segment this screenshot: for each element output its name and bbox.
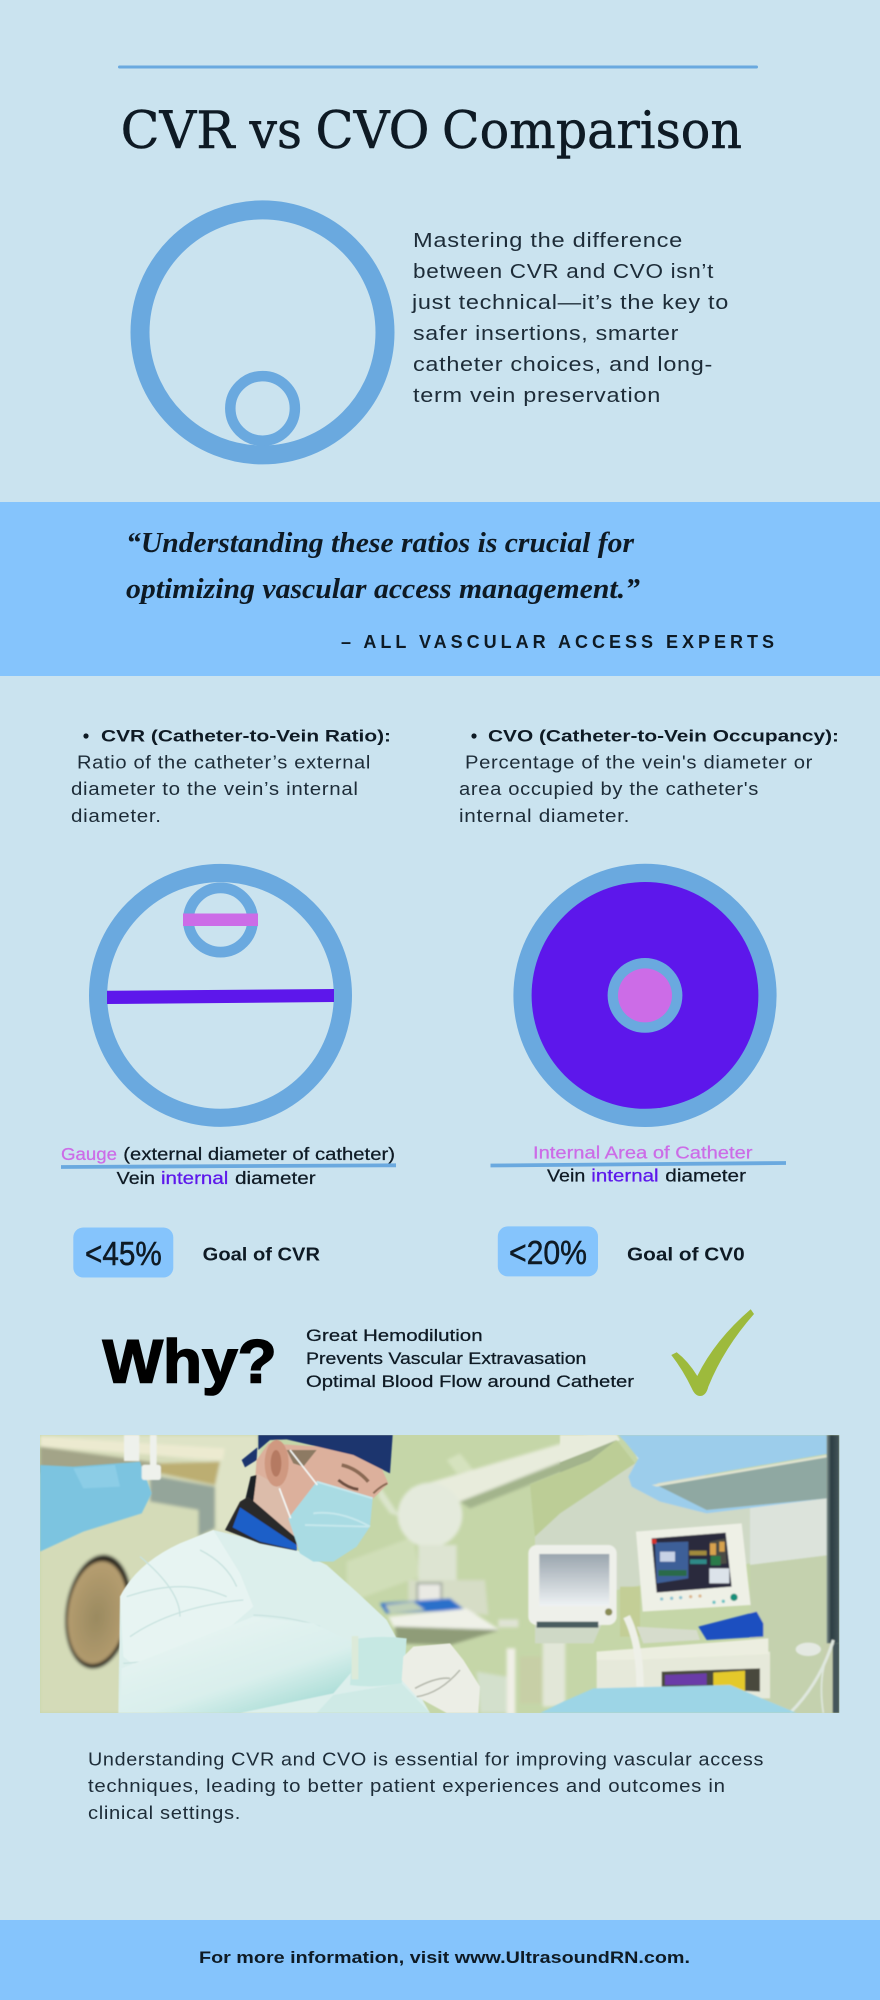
intro text: just technical—it’s the key to — [411, 292, 729, 314]
formula: CVO — [490, 1142, 786, 1186]
quote: “Understanding these ratios is crucial for — [126, 528, 635, 559]
formula: CVR: Gauge — [61, 1144, 117, 1164]
icon: catheter in vein — [140, 210, 385, 455]
intro text — [411, 230, 729, 407]
intro text: term vein preservation — [413, 385, 661, 407]
title: vs — [249, 102, 302, 161]
formula: CVO: diameter — [665, 1166, 746, 1186]
formula: CVO: Vein — [547, 1166, 585, 1186]
goal: CVO — [498, 1226, 745, 1276]
quote attribution: – ALL VASCULAR ACCESS EXPERTS — [341, 632, 774, 652]
formula: CVR: diameter — [235, 1168, 316, 1188]
surgeon head — [225, 1435, 393, 1562]
icon: check mark — [671, 1309, 754, 1396]
panel: footer — [0, 1920, 880, 2000]
header rule — [118, 66, 758, 68]
benefits list — [306, 1327, 635, 1391]
title: Comparison — [442, 102, 742, 161]
closing text — [88, 1748, 764, 1823]
panel: CVR definition: diameter to the vein’s internal — [71, 778, 359, 799]
closing text: Understanding CVR and CVO is essential for improving vascular access — [88, 1748, 764, 1770]
formula: CVO: Internal Area of Catheter — [533, 1142, 753, 1162]
quote — [126, 528, 640, 605]
panel: CVR definition: diameter. — [71, 805, 162, 826]
closing text: clinical settings. — [88, 1802, 241, 1823]
goal: CVO: Goal of CV0 — [627, 1245, 745, 1265]
photo background: door and drape — [40, 1435, 260, 1713]
formula: CVO: internal — [591, 1166, 659, 1186]
panel: CVO definition: internal diameter. — [459, 805, 630, 826]
goal: CVR — [73, 1228, 320, 1278]
photo: surgeon — [118, 1435, 480, 1713]
panel: CVO definition: Percentage of the vein's diameter or — [465, 752, 813, 773]
diagram: CVO — [513, 864, 777, 1127]
photo: surgeon in operating room — [40, 1435, 839, 1715]
benefits list: Great Hemodilution — [306, 1327, 483, 1345]
title — [121, 102, 742, 161]
title: CVO — [316, 102, 430, 161]
panel: CVO definition — [459, 726, 839, 826]
surgeon gown — [118, 1530, 480, 1713]
diagram: CVR — [98, 873, 343, 1118]
formula: CVR: (external diameter of catheter) — [123, 1144, 395, 1164]
intro text: catheter choices, and long- — [413, 354, 713, 376]
formula: CVR — [61, 1144, 396, 1188]
panel: CVR definition — [71, 726, 391, 826]
panel: quote band — [0, 502, 880, 676]
panel: CVO definition: area occupied by the catheter's — [459, 778, 759, 799]
intro text: safer insertions, smarter — [413, 323, 679, 345]
photo background: boom arm and tray — [347, 1435, 620, 1715]
intro text: between CVR and CVO isn’t — [413, 261, 714, 283]
panel: CVR definition: Ratio of the catheter’s external — [77, 752, 371, 773]
quote: optimizing vascular access management.” — [126, 574, 640, 605]
footer text: For more information, visit www.UltrasoundRN.com. — [199, 1948, 690, 1967]
closing text: techniques, leading to better patient experiences and outcomes in — [88, 1775, 726, 1796]
panel: CVO definition: CVO (Catheter-to-Vein Occupancy): — [488, 726, 839, 746]
photo background: right wall and equipment — [528, 1435, 839, 1713]
formula: CVR: internal — [161, 1168, 228, 1188]
benefits list: Prevents Vascular Extravasation — [306, 1350, 586, 1368]
goal: CVO: <20% — [509, 1234, 587, 1271]
photo: hanging drape and bracket — [40, 1435, 161, 1552]
goal: CVR: <45% — [85, 1235, 162, 1272]
intro text: Mastering the difference — [413, 230, 683, 252]
heading: why: Why? — [103, 1328, 277, 1396]
benefits list: Optimal Blood Flow around Catheter — [306, 1373, 635, 1391]
formula: CVR: Vein — [117, 1168, 155, 1188]
panel: CVR definition: CVR (Catheter-to-Vein Ratio): — [101, 726, 391, 746]
title: CVR — [121, 102, 236, 161]
goal: CVR: Goal of CVR — [203, 1245, 320, 1265]
